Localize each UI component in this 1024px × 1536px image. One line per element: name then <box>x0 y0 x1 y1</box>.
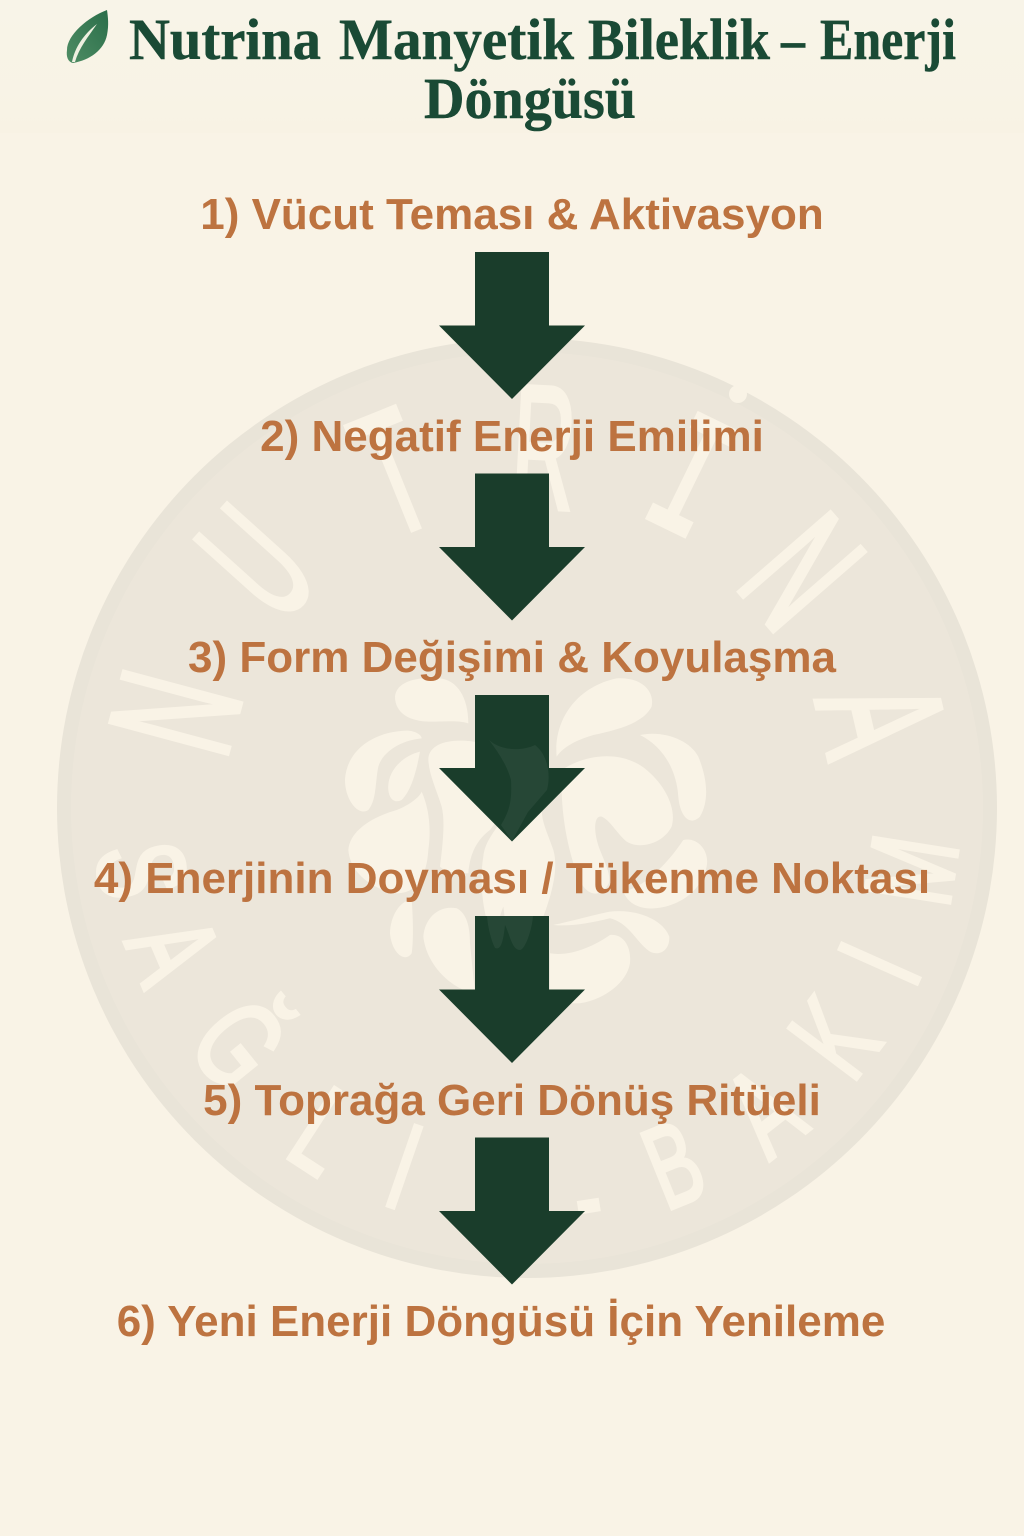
watermark seal: L <box>268 1061 380 1201</box>
title: Manyetik <box>339 7 575 72</box>
watermark seal: M <box>838 827 984 914</box>
title <box>129 7 956 132</box>
watermark seal: I <box>615 383 758 588</box>
step 2: 2) Negatif Enerji Emilimi <box>260 412 764 461</box>
watermark seal: Ğ <box>164 975 312 1113</box>
title: Döngüsü <box>424 66 636 131</box>
title: Enerji <box>820 7 956 72</box>
step 4: 4) Enerjinin Doyması / Tükenme Noktası <box>94 854 930 903</box>
watermark seal: A <box>779 664 984 771</box>
watermark seal: N <box>72 654 279 771</box>
watermark seal: - <box>563 1126 611 1266</box>
watermark seal: B <box>626 1095 721 1234</box>
title: Bileklik <box>588 7 771 72</box>
title: – <box>780 7 806 72</box>
watermark seal: N <box>706 481 899 662</box>
header band <box>0 0 1024 133</box>
watermark seal: A <box>100 898 248 1001</box>
step 1: 1) Vücut Teması & Aktivasyon <box>200 190 824 239</box>
step 3: 3) Form Değişimi & Koyulaşma <box>188 633 836 682</box>
watermark seal: I <box>372 1098 437 1235</box>
watermark seal: K <box>763 975 905 1100</box>
watermark seal: R <box>507 350 580 547</box>
watermark seal: I <box>812 925 947 1002</box>
watermark seal: S <box>70 833 214 907</box>
title: Nutrina <box>129 7 321 72</box>
watermark seal: T <box>329 370 457 574</box>
step 6: 6) Yeni Enerji Döngüsü İçin Yenileme <box>117 1297 885 1346</box>
icon: leaf <box>66 10 108 63</box>
watermark seal: A <box>700 1040 827 1182</box>
watermark seal: U <box>163 474 350 651</box>
step 5: 5) Toprağa Geri Dönüş Ritüeli <box>203 1076 821 1125</box>
